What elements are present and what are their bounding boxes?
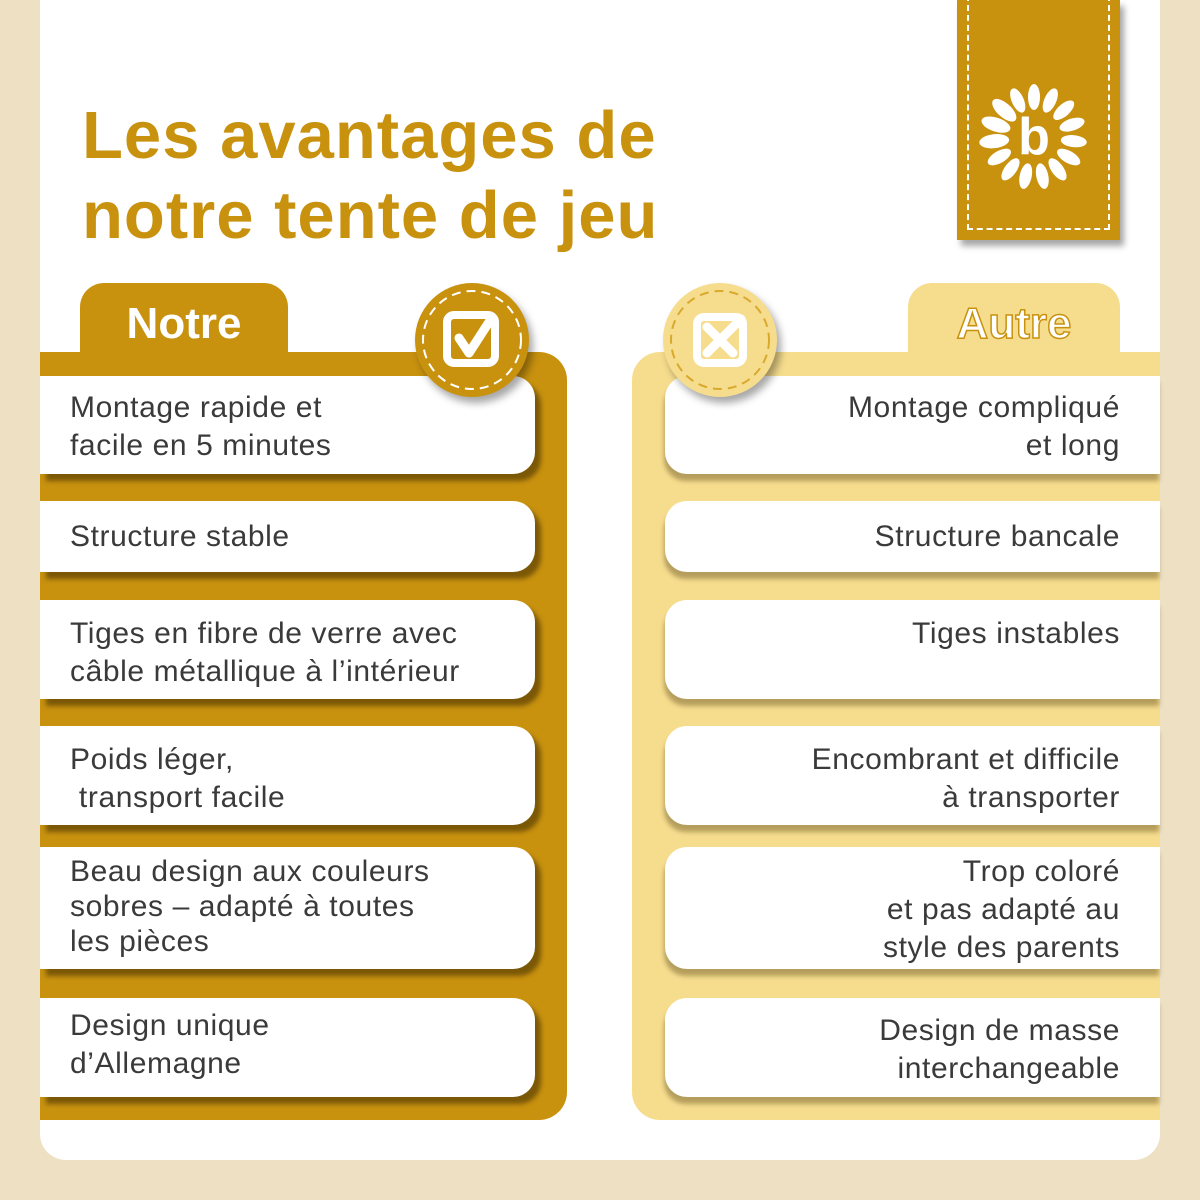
icon: flower logo: b (1018, 108, 1050, 166)
row L4: Poids léger, (70, 743, 234, 776)
row R3: Tiges instables (912, 617, 1120, 650)
icon: cross circle (663, 283, 777, 397)
tab: Notre: Notre (127, 299, 241, 348)
row L2: Structure stable (70, 520, 290, 553)
row L1: facile en 5 minutes (70, 429, 332, 462)
row R5: style des parents (883, 931, 1120, 964)
icon: flower logo (979, 84, 1087, 189)
row L4 (40, 726, 535, 825)
tab: Notre (80, 283, 288, 363)
row L6: d’Allemagne (70, 1047, 242, 1080)
panel: autre (632, 352, 1160, 1120)
icon: check circle (415, 283, 529, 397)
title: Les avantages de (82, 98, 657, 173)
row L5: Beau design aux couleurs (70, 855, 430, 888)
row L2 (40, 501, 535, 572)
row L5 (40, 847, 535, 969)
row R5 (665, 847, 1160, 969)
row R1: et long (1026, 429, 1120, 462)
tab: Autre (908, 283, 1120, 363)
row L6: Design unique (70, 1009, 270, 1042)
row R1 (665, 376, 1160, 474)
tab: Autre: Autre (957, 299, 1071, 348)
row L4: transport facile (79, 781, 285, 814)
row R1: Montage compliqué (848, 391, 1120, 424)
row R2: Structure bancale (875, 520, 1120, 553)
row L5: les pièces (70, 925, 209, 958)
row R2 (665, 501, 1160, 572)
row R4 (665, 726, 1160, 825)
row R6: Design de masse (879, 1014, 1120, 1047)
title: notre tente de jeu (82, 178, 658, 253)
row L3: Tiges en fibre de verre avec (70, 617, 458, 650)
row R6: interchangeable (897, 1052, 1120, 1085)
row L3: câble métallique à l’intérieur (70, 655, 460, 688)
panel: notre (40, 352, 567, 1120)
title (82, 98, 658, 253)
row R4: Encombrant et difficile (812, 743, 1120, 776)
row L1 (40, 376, 535, 474)
row L1: Montage rapide et (70, 391, 322, 424)
row R3 (665, 600, 1160, 699)
row L3 (40, 600, 535, 699)
row L5: sobres – adapté à toutes (70, 890, 415, 923)
logo tag (957, 0, 1120, 240)
row R4: à transporter (942, 781, 1120, 814)
row R5: Trop coloré (963, 855, 1120, 888)
left rows (40, 376, 544, 1107)
row R6 (665, 998, 1160, 1097)
row R5: et pas adapté au (887, 893, 1120, 926)
row L6 (40, 998, 535, 1097)
